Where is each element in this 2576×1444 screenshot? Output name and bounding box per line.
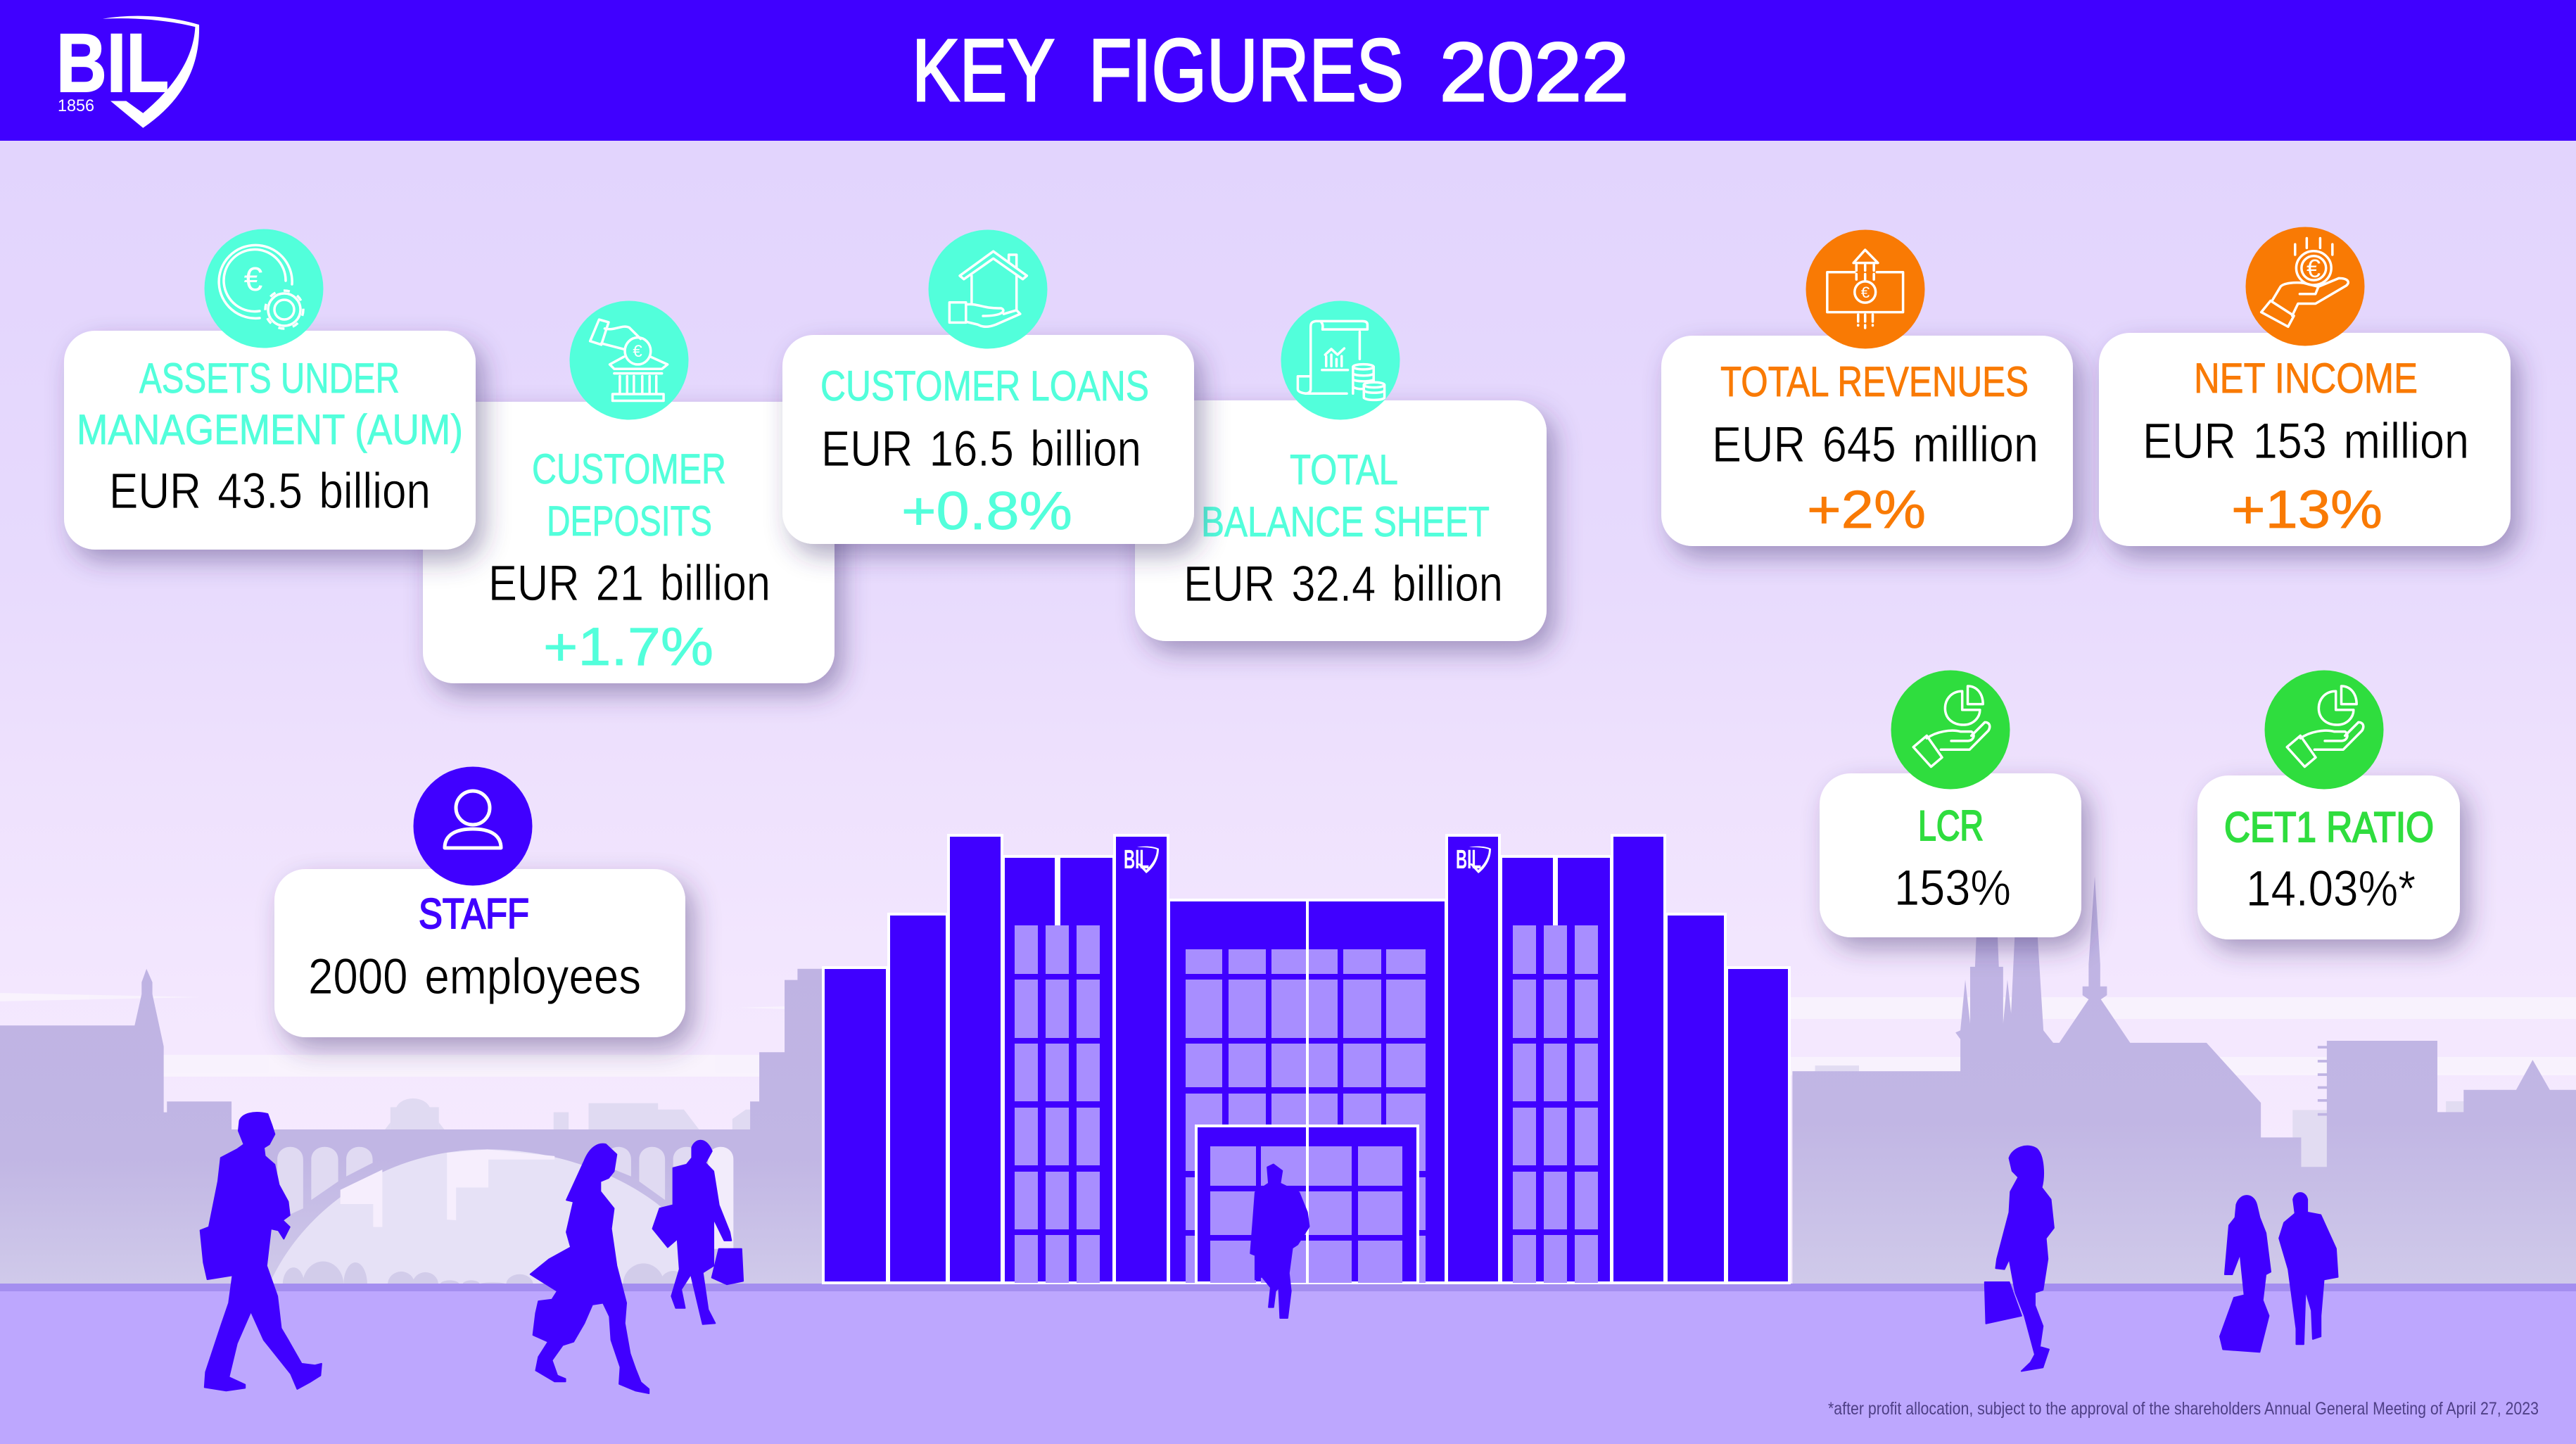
title: FIGURES [1089,22,1404,120]
customer deposits label [532,445,726,545]
title: KEY [912,22,1055,120]
tower logo right: BIL [1456,845,1481,875]
person: woman with suitcase [2220,1196,2271,1352]
person: woman with shopping bag [531,1144,649,1393]
net income label: NET INCOME [2194,355,2418,402]
panel: total revenues [1661,336,2073,546]
staff label: STAFF [419,890,529,937]
staff value: 2000 employees [308,949,641,1005]
icon: AUM coin and gear [204,229,324,348]
net income value: EUR 153 million [2143,414,2469,469]
sky streaks [0,993,2576,1077]
icon: net income coin above hand: € [2307,254,2321,283]
CET1 value: 14.03%* [2246,861,2416,917]
total balance sheet label: BALANCE SHEET [1201,498,1490,545]
ground [0,1284,2576,1444]
BIL logo: BIL [56,17,169,110]
AUM label: ASSETS UNDER [139,355,400,402]
LCR label: LCR [1918,802,1984,849]
icon: customer deposits bank and coin: € [633,342,642,361]
AUM label [77,355,463,453]
total revenues label: TOTAL REVENUES [1720,358,2029,405]
title: 2022 [1440,26,1629,119]
icon: AUM coin and gear: € [244,261,263,298]
customer deposits change: +1.7% [543,617,713,677]
panel: customer deposits [423,402,835,683]
net income change: +13% [2231,480,2383,540]
panel: staff [274,869,685,1037]
AUM label: MANAGEMENT (AUM) [77,406,463,453]
icon: CET1 pie chart on hand [2264,670,2384,790]
total balance sheet label [1201,446,1490,545]
central windows [1186,949,1426,1283]
panel: customer loans [782,335,1194,544]
BIL headquarters building [823,835,1789,1283]
person: figure at entrance [1250,1165,1309,1318]
BIL logo: 1856 [58,96,94,115]
panel: LCR [1820,773,2081,937]
customer deposits label: CUSTOMER [532,445,726,493]
title [912,22,1629,120]
AUM value: EUR 43.5 billion [109,464,431,519]
panel: assets under management [64,331,476,550]
total balance sheet label: TOTAL [1290,446,1398,493]
CET1 label: CET1 RATIO [2224,804,2434,851]
person: woman in coat [653,1141,743,1324]
icon: balance sheet scroll and coins [1281,301,1400,419]
tower logo left: BIL [1124,845,1149,875]
entrance door [1196,1126,1418,1283]
total balance sheet value: EUR 32.4 billion [1184,557,1503,612]
person: man with backpack [2279,1193,2338,1344]
icon: customer loans house on hand [929,229,1047,349]
customer loans change: +0.8% [901,481,1072,541]
icon: revenues banknote and arrow: € [1861,284,1870,301]
icon: LCR pie chart on hand [1891,670,2010,790]
total revenues value: EUR 645 million [1712,417,2038,473]
panel: CET1 ratio [2197,775,2460,939]
left wing windows [1015,925,1100,1283]
skyline: right city and cathedral [1792,876,2576,1285]
icon: revenues banknote and arrow [1806,229,1925,349]
skyline: left city and bridge [0,969,824,1307]
customer loans value: EUR 16.5 billion [821,422,1141,477]
header bar [0,0,2576,141]
panel: total balance sheet [1135,400,1547,641]
right wing windows [1513,925,1598,1283]
total revenues change: +2% [1807,480,1926,540]
panel: net income [2099,333,2511,546]
person: walking man with bag [201,1113,322,1391]
customer deposits label: DEPOSITS [547,498,712,545]
background sky [0,141,2576,1285]
icon: net income coin above hand [2246,227,2364,346]
customer deposits value: EUR 21 billion [488,556,770,612]
customer loans label: CUSTOMER LOANS [820,362,1149,410]
icon: customer deposits bank and coin [570,301,688,419]
LCR value: 153% [1894,861,2011,916]
person: woman with ponytail and bag [1985,1146,2054,1371]
icon: staff person [414,767,532,885]
